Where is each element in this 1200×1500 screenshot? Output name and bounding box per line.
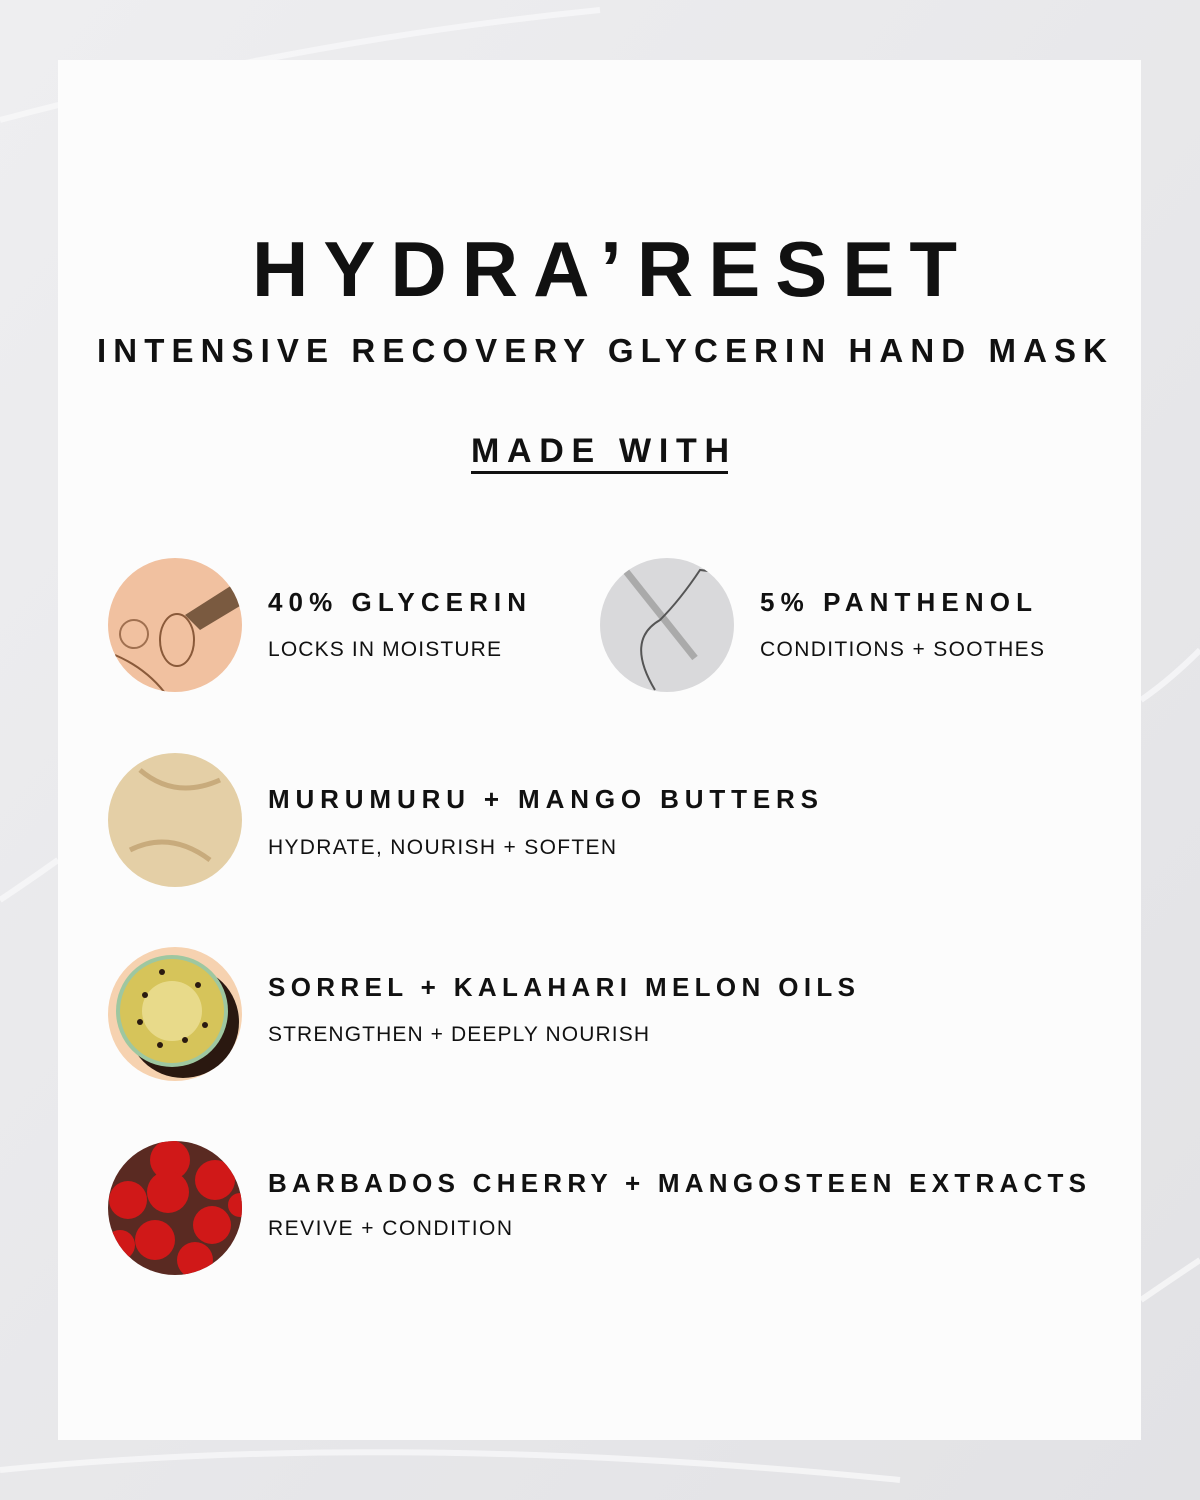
text: oils bbox=[268, 972, 855, 1046]
text: butters: HYDRATE, NOURISH + SOFTEN bbox=[268, 836, 616, 859]
text: oils: STRENGTHEN + DEEPLY NOURISH bbox=[268, 1023, 649, 1046]
text: extracts: BARBADOS CHERRY + MANGOSTEEN EXTRACTS bbox=[268, 1168, 1086, 1198]
icon: butters bbox=[108, 753, 242, 887]
text: panthenol: 5% PANTHENOL bbox=[760, 587, 1032, 617]
text: butters bbox=[268, 784, 818, 859]
text: extracts bbox=[268, 1168, 1086, 1240]
title: HYDRA’RESET bbox=[252, 225, 957, 313]
text: glycerin bbox=[268, 587, 526, 661]
icon: cherries bbox=[108, 1141, 242, 1275]
text: oils: SORREL + KALAHARI MELON OILS bbox=[268, 972, 855, 1002]
text: glycerin: 40% GLYCERIN bbox=[268, 587, 526, 617]
icon: melon bbox=[108, 947, 242, 1081]
text: panthenol: CONDITIONS + SOOTHES bbox=[760, 638, 1044, 661]
text: glycerin: LOCKS IN MOISTURE bbox=[268, 638, 501, 661]
text: panthenol bbox=[760, 587, 1044, 661]
subtitle: INTENSIVE RECOVERY GLYCERIN HAND MASK bbox=[97, 332, 1107, 369]
icon: glycerin drops bbox=[108, 558, 242, 692]
text: butters: MURUMURU + MANGO BUTTERS bbox=[268, 784, 818, 814]
text: extracts: REVIVE + CONDITION bbox=[268, 1217, 512, 1240]
heading: made with: MADE WITH bbox=[471, 432, 729, 470]
icon: panthenol pipette bbox=[600, 558, 734, 692]
